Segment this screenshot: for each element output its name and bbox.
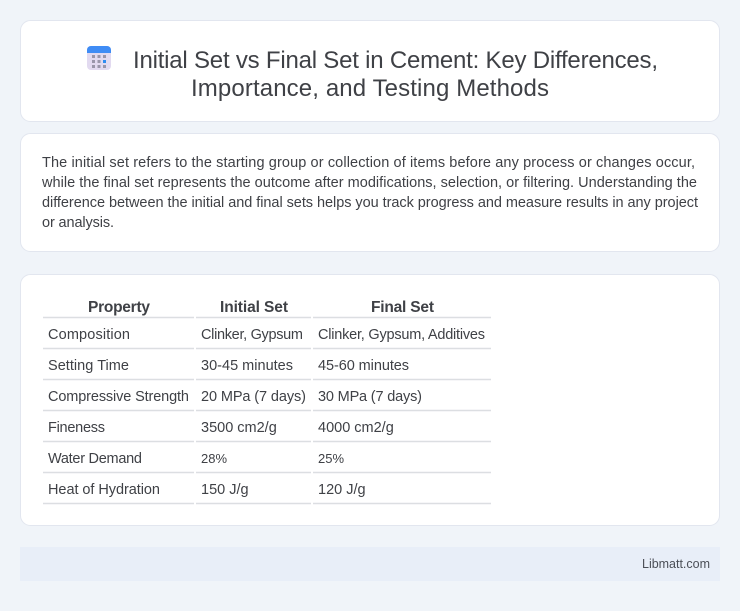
text block: introduction: while the final set represents the outcome after modifications, selection, or filtering. Understanding the: [41, 175, 697, 191]
panel: header: [20, 20, 720, 122]
title: [133, 47, 658, 102]
panel: comparison table: [20, 274, 720, 526]
row: compressive strength: 20 MPa (7 days): [201, 389, 306, 405]
table header: [88, 299, 434, 316]
row: water demand: [48, 451, 344, 467]
footer: Libmatt.com: [642, 557, 710, 571]
row: composition: Composition: [48, 327, 130, 343]
row: fineness: 3500 cm2/g: [201, 420, 277, 436]
title: Initial Set vs Final Set in Cement: Key Differences,: [133, 47, 658, 74]
row: composition: [48, 327, 485, 343]
row: fineness: Fineness: [48, 420, 105, 436]
table header: Final Set: [371, 299, 434, 316]
row: water demand: 25%: [318, 451, 344, 466]
row: fineness: 4000 cm2/g: [318, 420, 394, 436]
row: setting time: [48, 358, 409, 374]
panel: introduction: [20, 134, 720, 252]
title: Importance, and Testing Methods: [191, 75, 549, 102]
row: heat of hydration: 150 J/g: [201, 482, 249, 498]
table header: Initial Set: [220, 299, 288, 316]
row: compressive strength: 30 MPa (7 days): [318, 389, 422, 405]
row: water demand: Water Demand: [48, 451, 142, 467]
row: compressive strength: Compressive Strength: [48, 389, 189, 405]
table header: Property: [88, 299, 150, 316]
text block: introduction: difference between the initial and final sets helps you track progress and measure results in any project: [42, 195, 698, 211]
row: compressive strength: [48, 389, 422, 405]
row: heat of hydration: Heat of Hydration: [48, 482, 160, 498]
row: composition: Clinker, Gypsum: [201, 327, 303, 343]
icon: calendar: [87, 46, 111, 70]
row: composition: Clinker, Gypsum, Additives: [318, 327, 485, 343]
footer: [20, 547, 720, 581]
row: heat of hydration: 120 J/g: [318, 482, 366, 498]
text block: introduction: or analysis.: [42, 215, 114, 231]
row: setting time: 45-60 minutes: [318, 358, 409, 374]
row: water demand: 28%: [201, 451, 227, 466]
row: setting time: 30-45 minutes: [201, 358, 293, 374]
row: setting time: Setting Time: [48, 358, 129, 374]
row: heat of hydration: [48, 482, 366, 498]
row: fineness: [48, 420, 394, 436]
text block: introduction: The initial set refers to the starting group or collection of items before any process or changes occur,: [42, 155, 695, 171]
text block: introduction: [41, 155, 698, 231]
